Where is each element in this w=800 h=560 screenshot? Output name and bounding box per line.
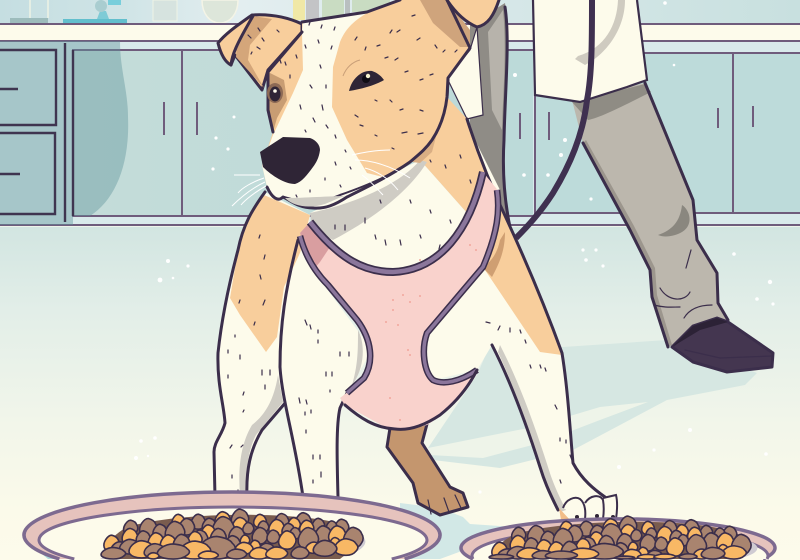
bowl rim [24, 492, 440, 559]
dog: pink harness [300, 172, 500, 429]
dog: chest [310, 133, 467, 275]
shelf items [10, 0, 390, 23]
dog: head [218, 0, 499, 208]
upper kibble layers [104, 509, 363, 552]
brown patch around left eye [268, 72, 287, 132]
dog [214, 0, 617, 525]
coat piece behind ear [447, 27, 483, 119]
bowl inside [472, 529, 768, 559]
right ear shading and flap [420, 0, 470, 47]
cast shadow on floor [428, 340, 757, 468]
dog: left back leg and shoulder [214, 192, 310, 497]
right eye [343, 60, 384, 91]
teal pool under right bowl [400, 503, 530, 559]
shadow on left cabinets [0, 41, 128, 225]
dog: far hind leg brown [387, 424, 468, 515]
kibble base [497, 522, 749, 559]
wall [0, 0, 800, 24]
lower kibble layer [489, 543, 746, 559]
dog: right front leg [420, 80, 617, 525]
snow specks [134, 1, 775, 494]
shoe [672, 318, 773, 372]
whiskers [232, 150, 410, 206]
right food bowl [461, 516, 775, 559]
person: vet standing behind the dog [447, 0, 773, 372]
kibble base [108, 515, 360, 559]
white blaze and muzzle [262, 13, 383, 208]
upper kibble layers [492, 516, 751, 559]
kibble pile [489, 516, 751, 559]
light sweep across shadow [428, 402, 648, 458]
floor [0, 227, 800, 560]
left food bowl [24, 492, 440, 559]
mouth [284, 168, 400, 201]
bowl base [36, 549, 430, 559]
back leg of trousers [470, 3, 511, 232]
head shape [262, 0, 470, 208]
cabinets [73, 50, 800, 216]
left eye [267, 83, 283, 103]
counter top [0, 24, 800, 41]
food shadow [100, 532, 365, 559]
lab coat [533, 0, 647, 102]
nose [260, 137, 320, 184]
food shadow [488, 540, 757, 559]
left ear [218, 15, 302, 90]
bowl rim [461, 519, 775, 559]
head outline [267, 0, 470, 208]
dog: fur ticks [228, 15, 572, 493]
dog: front leg [280, 240, 372, 497]
bowl inside [39, 507, 427, 559]
front leg of trousers [572, 83, 728, 347]
dog: paw [559, 495, 617, 520]
kibble pile [101, 509, 363, 559]
leash [516, 0, 592, 238]
